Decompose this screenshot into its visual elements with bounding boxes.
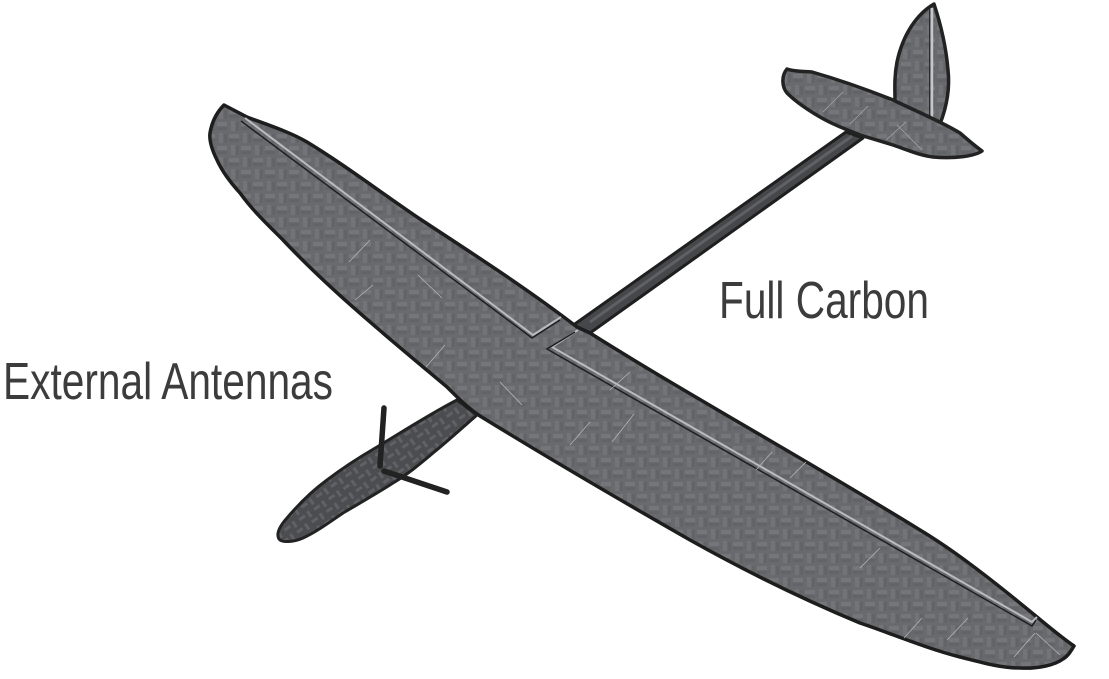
- stabilizer surface seams: [823, 92, 922, 150]
- nose section: [278, 400, 477, 542]
- horizontal stabilizer: [783, 69, 982, 158]
- lower antenna: [384, 471, 447, 492]
- right wing spar line: [547, 330, 1037, 626]
- upper antenna: [380, 408, 384, 466]
- label: external antennas: External Antennas: [3, 353, 333, 411]
- vertical fin: [895, 4, 949, 124]
- left wing spar line: [241, 118, 561, 338]
- label: full carbon: Full Carbon: [719, 272, 929, 330]
- main wing: [210, 105, 1074, 668]
- wing surface seams: [349, 240, 1060, 657]
- antennas: [380, 408, 447, 492]
- fuselage boom: [572, 132, 863, 333]
